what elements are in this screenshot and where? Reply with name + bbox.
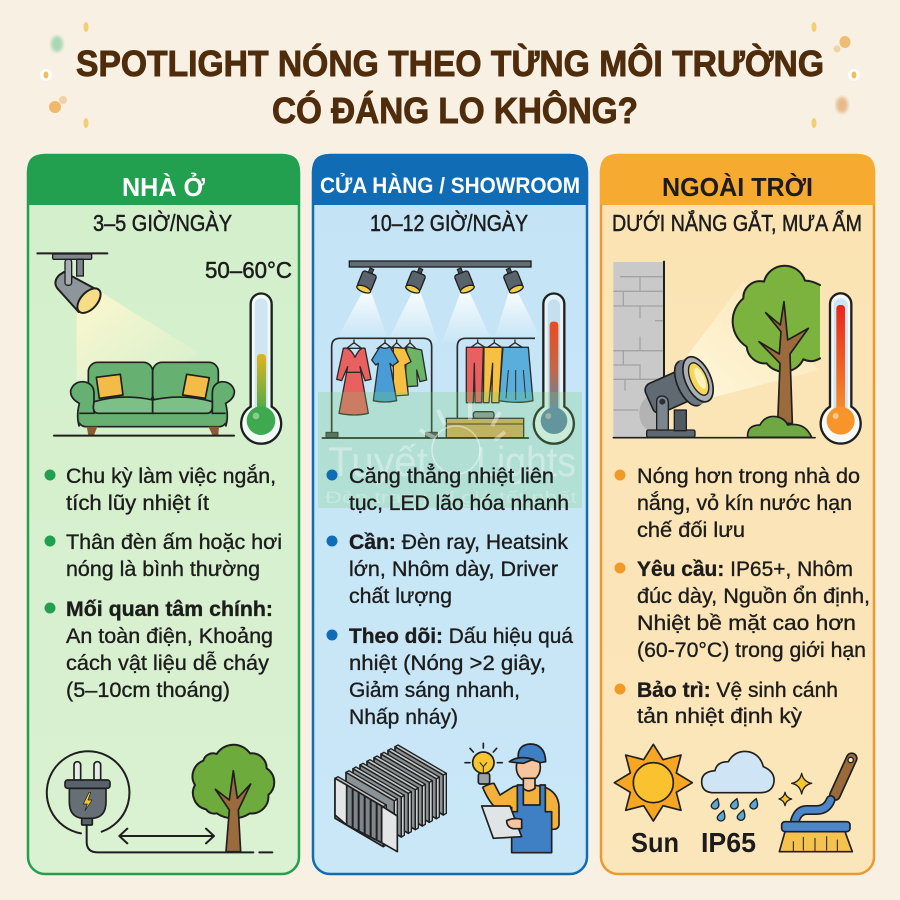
bullet list blue [326,463,573,729]
icon: sun [614,744,692,821]
bullet list blue: Theo dõi: Dấu hiệu quá [349,624,573,648]
bullet list orange [614,464,870,728]
bullet list green: cách vật liệu dễ cháy [66,650,269,675]
panel: ngoài trời [600,154,875,874]
bullet list green: Mối quan tâm chính: [66,597,273,621]
title: SPOTLIGHT NÓNG THEO TỪNG MÔI TRƯỜNG [76,42,824,84]
bullet list blue: chất lượng [349,584,452,608]
bullet list blue: tục, LED lão hóa nhanh [349,491,569,515]
watermark: Đèn trang trí giá tốt nhất [325,488,577,507]
title [76,42,824,131]
bullet list blue: Căng thẳng nhiệt liên [349,463,554,488]
bullet list blue: lớn, Nhôm dày, Driver [349,557,558,581]
header orange [600,154,875,205]
header blue [312,154,588,205]
icon: rain cloud [702,751,774,822]
bullet list green [44,463,282,702]
temperature label: 50–60°C [205,257,292,283]
illustration: track lights and clothing racks [322,261,540,438]
watermark: Lights [476,438,576,485]
bullet list orange: Nóng hơn trong nhà do [637,464,860,488]
thermometer red [534,293,574,444]
icon: plug, distance arrow and tree [47,745,274,852]
bullet list orange: chế đối lưu [637,518,745,542]
bullet list orange: (60-70°C) trong giới hạn [637,638,866,662]
illustration: spotlight and sofa [37,253,234,436]
bullet list green: (5–10cm thoáng) [66,678,230,702]
hours: 3–5 GIỜ/NGÀY [93,210,232,236]
heading ngoài trời: NGOÀI TRỜI [662,172,813,202]
header green [27,154,300,205]
heading nhà ở: NHÀ Ở [122,171,206,202]
thermometer green [241,293,281,444]
panel: nhà ở [27,154,300,874]
label sun: Sun [631,827,679,858]
bullet list blue: Giảm sáng nhanh, [349,678,520,702]
watermark: Tuyết [328,438,428,485]
bullet list orange: Bảo trì: Vệ sinh cánh [637,678,838,702]
bullet list green: Chu kỳ làm việc ngắn, [66,463,276,488]
heading showroom: CỬA HÀNG / SHOWROOM [320,173,580,198]
panel: cửa hàng / showroom [312,154,588,874]
panel background blue [313,155,587,874]
icon: heatsink [335,745,446,852]
bullet list orange: Nhiệt bề mặt cao hơn [637,611,856,635]
bullet list orange: nắng, vỏ kín nước hạn [637,490,852,515]
panel background orange [601,155,874,874]
bullet list green: tích lũy nhiệt ít [66,491,209,515]
bullet list green: An toàn điện, Khoảng [66,624,273,648]
bullet list green: nóng là bình thường [66,557,260,581]
hours: 10–12 GIỜ/NGÀY [370,210,528,236]
bullet list orange: Yêu cầu: IP65+, Nhôm [637,557,853,581]
bullet list blue: Cần: Đèn ray, Heatsink [349,530,568,554]
conditions: DƯỚI NẮNG GẮT, MƯA ẨM [612,209,862,236]
thermometer hot [821,293,861,444]
panel background green [28,155,299,874]
illustration: wall, spotlight and tree [613,262,820,438]
watermark [318,392,582,508]
bullet list blue: nhiệt (Nóng >2 giây, [349,651,546,675]
bullet list blue: Nhấp nháy) [349,705,458,729]
icon: technician with bulb and tablet [465,743,559,853]
icon: cleaning brush [779,757,853,852]
bullet list orange: tản nhiệt định kỳ [637,704,802,728]
bullet list orange: đúc dày, Nguồn ổn định, [637,584,870,608]
label ip65: IP65 [701,827,756,858]
title: CÓ ĐÁNG LO KHÔNG? [272,89,638,131]
decorative sparkles [40,22,860,128]
bullet list green: Thân đèn ấm hoặc hơi [66,530,282,554]
